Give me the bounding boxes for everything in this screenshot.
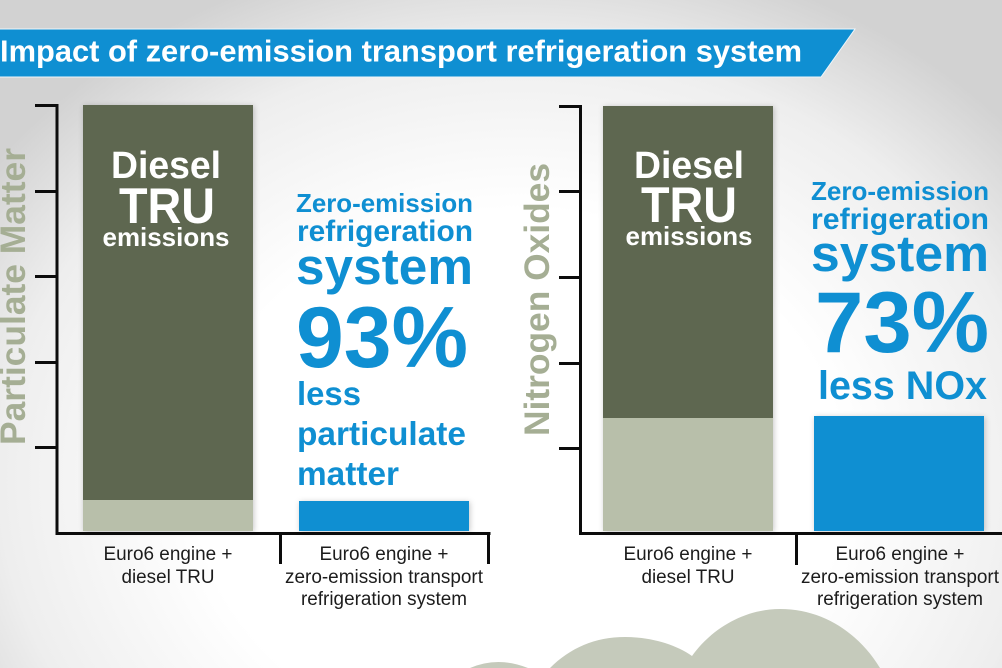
bar: diesel TRU emissions: [83, 105, 253, 531]
chart axes: [559, 105, 1002, 565]
bar label: diesel TRU emissions: emissions: [626, 221, 752, 251]
x label: Euro6 engine + zero-emission system: Euro6 engine +: [320, 544, 448, 565]
x label: Euro6 engine + diesel TRU: Euro6 engine +: [624, 544, 752, 565]
x label: Euro6 engine + zero-emission system: refrigeration system: [301, 589, 467, 610]
callout: 93% less particulate matter: 93%: [296, 290, 468, 386]
callout: 73% less NOx: Zero-emission: [811, 176, 989, 206]
x label: Euro6 engine + zero-emission system: Euro6 engine +: [836, 544, 964, 565]
x label: Euro6 engine + zero-emission system: zero-emission transport: [285, 567, 484, 588]
x label: Euro6 engine + diesel TRU: diesel TRU: [122, 567, 214, 588]
x label: Euro6 engine + diesel TRU: diesel TRU: [642, 567, 734, 588]
x label: Euro6 engine + diesel TRU: [624, 544, 752, 588]
y-axis title: nitrogen oxides: Nitrogen Oxides: [517, 163, 557, 436]
bar label: diesel TRU emissions: TRU: [119, 178, 215, 234]
callout: 93% less particulate matter: matter: [297, 456, 399, 493]
bar label: diesel TRU emissions: [102, 145, 230, 252]
callout: 93% less particulate matter: particulate: [297, 416, 466, 453]
x label: Euro6 engine + diesel TRU: [104, 544, 232, 588]
bar label: diesel TRU emissions: TRU: [641, 177, 737, 233]
title banner: [0, 29, 855, 77]
bar label: diesel TRU emissions: [626, 145, 752, 251]
x label: Euro6 engine + zero-emission system: zero-emission transport: [801, 567, 1000, 588]
title banner: Impact of zero-emission transport refrigeration system: [0, 34, 802, 68]
bar label: diesel TRU emissions: Diesel: [634, 145, 744, 187]
x label: Euro6 engine + zero-emission system: [285, 544, 484, 610]
chart axes: [35, 104, 490, 564]
callout: 73% less NOx: [811, 176, 989, 408]
panel: nitrogen oxides chart: [517, 105, 1002, 610]
callout: 93% less particulate matter: less: [297, 376, 361, 413]
icon: cloud: [470, 609, 880, 668]
callout: 73% less NOx: refrigeration: [811, 203, 989, 236]
panel: particulate matter chart: [0, 104, 490, 610]
bar: diesel TRU emissions: [603, 106, 773, 531]
bar: zero-emission system: [299, 501, 469, 531]
x label: Euro6 engine + diesel TRU: Euro6 engine +: [104, 544, 232, 565]
callout: 73% less NOx: less NOx: [818, 364, 987, 408]
x label: Euro6 engine + zero-emission system: [801, 544, 1000, 610]
bar label: diesel TRU emissions: emissions: [102, 222, 230, 252]
callout: 93% less particulate matter: [296, 188, 473, 493]
bar label: diesel TRU emissions: Diesel: [111, 145, 221, 187]
bar: zero-emission system: [814, 416, 984, 531]
callout: 93% less particulate matter: system: [296, 238, 473, 295]
callout: 93% less particulate matter: Zero-emission: [296, 188, 473, 218]
callout: 93% less particulate matter: refrigeration: [297, 215, 473, 248]
callout: 73% less NOx: 73%: [815, 275, 989, 371]
x label: Euro6 engine + zero-emission system: refrigeration system: [817, 589, 983, 610]
callout: 73% less NOx: system: [811, 225, 989, 282]
